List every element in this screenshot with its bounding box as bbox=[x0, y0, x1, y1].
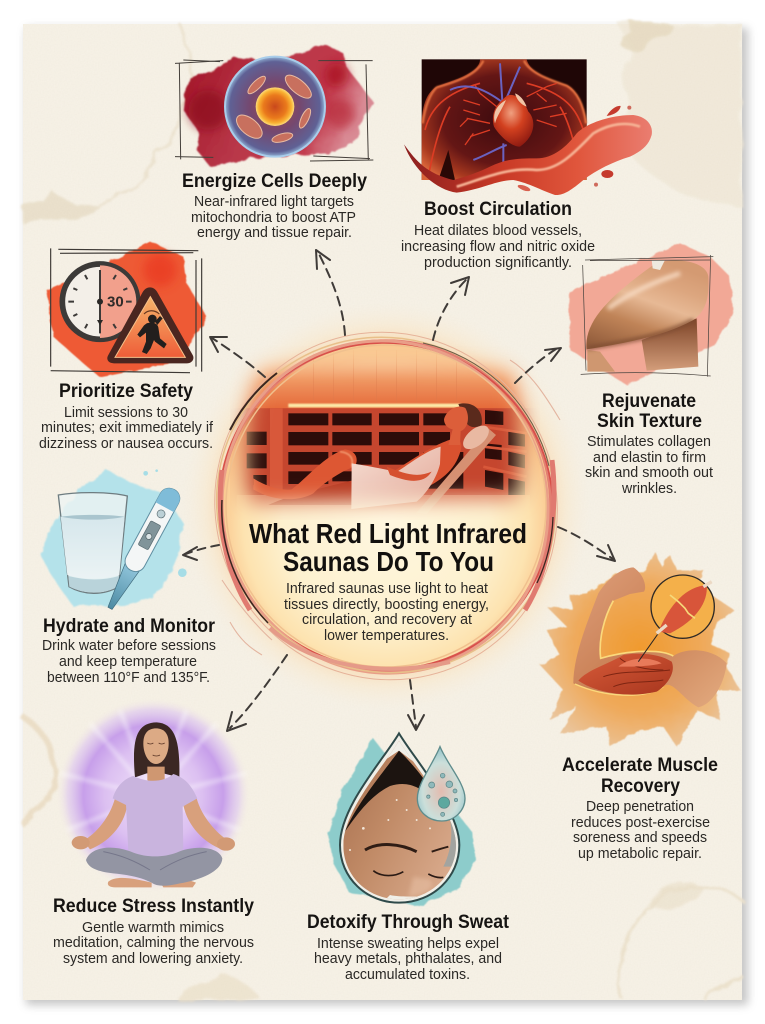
description: dizziness or nausea occurs. bbox=[39, 436, 213, 452]
icon: flexed arm with muscle inset bbox=[540, 552, 740, 747]
description: soreness and speeds bbox=[573, 830, 707, 846]
icon: glass of water and thermometer bbox=[40, 469, 187, 613]
heading: Recovery bbox=[601, 776, 680, 797]
description: increasing flow and nitric oxide bbox=[401, 239, 595, 255]
description: energy and tissue repair. bbox=[197, 225, 352, 241]
panel: reduce stress bbox=[53, 698, 254, 967]
arrow to energize cells bbox=[316, 250, 345, 335]
icon: sweat drop with face bbox=[328, 733, 475, 907]
description: Intense sweating helps expel bbox=[317, 936, 499, 952]
panel: accelerate muscle recovery bbox=[540, 552, 740, 862]
far leg bbox=[268, 481, 352, 505]
description: minutes; exit immediately if bbox=[41, 420, 214, 436]
description: and elastin to firm bbox=[593, 450, 706, 466]
description: between 110°F and 135°F. bbox=[47, 670, 210, 686]
description: Gentle warmth mimics bbox=[82, 920, 224, 936]
heading: Energize Cells Deeply bbox=[182, 171, 367, 192]
arrow to boost circulation bbox=[433, 277, 469, 340]
heading bbox=[597, 391, 702, 432]
description: reduces post-exercise bbox=[571, 815, 710, 831]
arrow to detoxify bbox=[408, 680, 424, 730]
intro text: lower temperatures. bbox=[324, 628, 449, 644]
description bbox=[191, 194, 356, 241]
icon: cell with mitochondria bbox=[175, 45, 373, 167]
heading bbox=[562, 755, 718, 797]
arrow to reduce stress bbox=[227, 655, 287, 731]
heading: Hydrate and Monitor bbox=[43, 616, 216, 637]
intro text: tissues directly, boosting energy, bbox=[284, 597, 489, 613]
heading: Rejuvenate bbox=[602, 391, 696, 412]
intro text: circulation, and recovery at bbox=[302, 612, 472, 628]
heading: Reduce Stress Instantly bbox=[53, 896, 254, 917]
description bbox=[42, 638, 216, 686]
torso and arm bbox=[396, 440, 462, 486]
central panel bbox=[214, 332, 560, 680]
towel bbox=[351, 447, 441, 509]
description: accumulated toxins. bbox=[345, 967, 470, 983]
heading: Prioritize Safety bbox=[59, 381, 193, 402]
panel: hydrate and monitor bbox=[40, 469, 216, 686]
description: mitochondria to boost ATP bbox=[191, 210, 356, 226]
description: heavy metals, phthalates, and bbox=[314, 951, 502, 967]
illustration: woman relaxing in infrared sauna bbox=[230, 347, 540, 520]
sketched ring border bbox=[151, 269, 621, 743]
description: wrinkles. bbox=[621, 481, 677, 497]
arrows: dashed connectors bbox=[183, 250, 615, 731]
description bbox=[585, 434, 713, 497]
intro text: Infrared saunas use light to heat bbox=[286, 581, 488, 597]
title bbox=[249, 518, 527, 577]
description bbox=[53, 920, 254, 967]
panel: rejuvenate skin bbox=[568, 243, 733, 497]
head bbox=[444, 407, 468, 445]
description: Deep penetration bbox=[586, 799, 694, 815]
description: production significantly. bbox=[424, 255, 572, 271]
description: and keep temperature bbox=[59, 654, 197, 670]
panel: boost circulation bbox=[401, 59, 652, 271]
heading: Accelerate Muscle bbox=[562, 755, 718, 776]
icon: meditating woman with purple aura bbox=[56, 698, 251, 892]
central glow halo bbox=[181, 301, 591, 711]
arrow to muscle recovery bbox=[558, 527, 615, 561]
arrow to hydrate bbox=[183, 545, 219, 560]
near leg bbox=[253, 449, 357, 499]
icon: heart, vessels and blood ribbon bbox=[404, 59, 652, 195]
title: Saunas Do To You bbox=[283, 546, 494, 577]
description: system and lowering anxiety. bbox=[63, 951, 243, 967]
description bbox=[401, 223, 595, 271]
hair bbox=[458, 403, 482, 427]
pillow bbox=[463, 426, 489, 450]
description bbox=[39, 405, 214, 452]
chair bbox=[424, 428, 496, 506]
title: What Red Light Infrared bbox=[249, 518, 527, 549]
panel: prioritize safety bbox=[39, 242, 214, 452]
description: Heat dilates blood vessels, bbox=[414, 223, 582, 239]
description: skin and smooth out bbox=[585, 465, 713, 481]
description bbox=[314, 936, 502, 983]
description: Stimulates collagen bbox=[587, 434, 711, 450]
description: meditation, calming the nervous bbox=[53, 935, 254, 951]
description: Limit sessions to 30 bbox=[64, 405, 188, 421]
description: Drink water before sessions bbox=[42, 638, 216, 654]
icon: 30 minute timer and warning sign: 30 bbox=[107, 294, 124, 311]
description bbox=[571, 799, 710, 862]
icon: 30 minute timer and warning sign bbox=[47, 242, 207, 377]
icon: smooth skin on arm bbox=[568, 243, 733, 385]
arrow to prioritize safety bbox=[210, 337, 265, 377]
arrow to rejuvenate skin bbox=[515, 348, 561, 383]
heading: Boost Circulation bbox=[424, 199, 572, 220]
central disc bbox=[220, 340, 552, 672]
panel: detoxify through sweat bbox=[307, 733, 510, 983]
heading: Detoxify Through Sweat bbox=[307, 912, 510, 933]
description: up metabolic repair. bbox=[578, 846, 702, 862]
heading: Skin Texture bbox=[597, 411, 702, 432]
intro text bbox=[284, 581, 489, 644]
description: Near-infrared light targets bbox=[194, 194, 354, 210]
panel: energize cells bbox=[175, 45, 373, 241]
